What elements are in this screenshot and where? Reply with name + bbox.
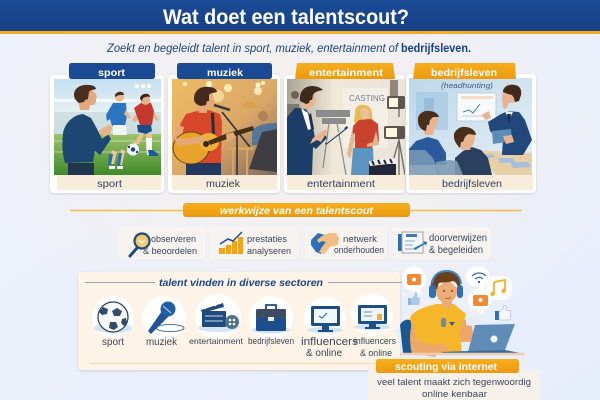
icon: document with arrow bbox=[398, 232, 427, 253]
icon: briefcase bbox=[249, 296, 293, 340]
panel: entertainment bbox=[284, 63, 405, 193]
tab bbox=[295, 63, 395, 79]
panel: bedrijfsleven bbox=[406, 63, 536, 193]
icon: football bbox=[92, 296, 134, 338]
tab bbox=[413, 63, 516, 79]
tab bbox=[69, 63, 155, 79]
panel: muziek: muziek bbox=[207, 67, 243, 79]
panel: bedrijfsleven: bedrijfsleven bbox=[442, 178, 502, 190]
icon: like thumb right bbox=[495, 305, 511, 320]
illustration: casting scene: CASTING bbox=[349, 93, 385, 103]
step: netwerk onderhouden bbox=[305, 227, 387, 259]
panel: sport: sport bbox=[97, 178, 122, 190]
callout body bbox=[368, 370, 540, 400]
illustration: online scout with laptop bbox=[395, 266, 525, 358]
panel: talent vinden in diverse sectoren bbox=[78, 272, 402, 370]
panel: talent vinden in diverse sectoren: & online bbox=[306, 348, 342, 359]
caption bbox=[172, 175, 277, 190]
panel: bedrijfsleven: bedrijfsleven bbox=[431, 67, 497, 79]
panel: talent vinden in diverse sectoren: influencers bbox=[301, 336, 359, 348]
callout: scouting via internet bbox=[368, 359, 540, 400]
step: doorverwijzen en begeleiden bbox=[392, 227, 491, 259]
panel: talent vinden in diverse sectoren: sport bbox=[102, 337, 124, 348]
step: observeren en beoordelen bbox=[118, 227, 205, 259]
speech bubble: orange heart bbox=[402, 267, 426, 296]
callout: scouting via internet: scouting via internet bbox=[395, 362, 498, 373]
header banner bbox=[0, 0, 600, 34]
icon: like thumb left bbox=[408, 292, 420, 305]
step: doorverwijzen en begeleiden: doorverwijzen bbox=[429, 233, 487, 244]
step: doorverwijzen en begeleiden: & begeleiden bbox=[429, 245, 483, 256]
illustration: musician with guitar bbox=[172, 79, 277, 175]
illustration: scout watching football players bbox=[54, 79, 161, 175]
subtitle: bedrijfsleven. bbox=[401, 43, 471, 55]
icon: microphone bbox=[142, 296, 186, 340]
speech bubble: wifi bbox=[466, 266, 490, 293]
speech bubble: second orange heart bbox=[468, 288, 492, 315]
caption bbox=[287, 175, 405, 190]
tab bbox=[177, 63, 272, 79]
panel: talent vinden in diverse sectoren: influencers bbox=[354, 336, 396, 346]
panel: muziek bbox=[168, 63, 280, 193]
section heading: werkwijze: werkwijze van een talentscout bbox=[220, 206, 374, 217]
panel: talent vinden in diverse sectoren: muziek bbox=[146, 337, 178, 348]
icon: film clapper bbox=[195, 294, 241, 340]
panel: entertainment: entertainment bbox=[309, 67, 384, 79]
step: prestaties analyseren: analyseren bbox=[247, 246, 291, 257]
icon: magnifying glass bbox=[130, 234, 150, 256]
step: prestaties analyseren: prestaties bbox=[247, 234, 287, 245]
title: Wat doet een talentscout? bbox=[163, 6, 409, 29]
step: prestaties analyseren bbox=[210, 227, 299, 259]
callout banner bbox=[376, 359, 519, 373]
illustration: headhunting meeting: (headhunting) bbox=[441, 81, 494, 90]
step: netwerk onderhouden: onderhouden bbox=[334, 245, 384, 256]
panel heading: talent vinden in diverse sectoren bbox=[159, 277, 323, 289]
step: observeren en beoordelen: observeren bbox=[151, 234, 196, 245]
caption bbox=[57, 175, 161, 190]
subtitle: Zoekt en begeleidt talent in sport, muziek, entertainment of bbox=[106, 43, 400, 55]
callout: scouting via internet: veel talent maakt zich tegenwoordig bbox=[377, 377, 531, 388]
panel: sport bbox=[50, 63, 164, 193]
section heading: werkwijze bbox=[70, 203, 522, 217]
caption bbox=[409, 175, 533, 190]
callout: scouting via internet: online kenbaar bbox=[422, 389, 487, 400]
panel: entertainment: entertainment bbox=[307, 179, 375, 190]
step: observeren en beoordelen: & beoordelen bbox=[143, 246, 197, 257]
icon: handshake bbox=[311, 233, 339, 254]
panel: muziek: muziek bbox=[206, 178, 241, 190]
panel: sport: sport bbox=[98, 67, 126, 79]
panel: talent vinden in diverse sectoren: & online bbox=[360, 348, 392, 358]
speech bubble: music note bbox=[487, 276, 512, 300]
icon: bar chart bbox=[219, 232, 243, 254]
icon: monitor with checkmark bbox=[304, 297, 346, 339]
panel: talent vinden in diverse sectoren: bedrijfsleven bbox=[248, 336, 294, 346]
panel: talent vinden in diverse sectoren: entertainment bbox=[189, 336, 244, 346]
icon: monitor with online content bbox=[351, 294, 393, 336]
step: netwerk onderhouden: netwerk bbox=[343, 234, 377, 245]
